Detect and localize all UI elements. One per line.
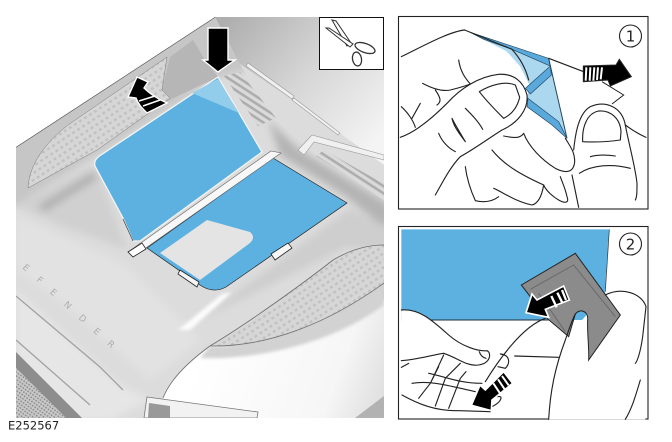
- step number 2: [620, 233, 642, 255]
- arrow lower: [471, 372, 513, 411]
- right fender textured vent: [210, 245, 384, 346]
- arrow: curved peel: [128, 77, 167, 113]
- tape tab right: [271, 243, 292, 260]
- icon: scissors box: [320, 18, 384, 70]
- scissors: [326, 20, 376, 67]
- top slatted vent: [224, 72, 276, 126]
- dark grille band: [16, 352, 82, 418]
- bumper lines: [16, 296, 123, 405]
- central dark cowl section: [162, 40, 218, 102]
- main illustration: bonnet with blue film: [0, 10, 390, 420]
- step number 2: 2: [626, 236, 635, 254]
- wiper assembly: [246, 63, 384, 160]
- panel 1: peeling film backing: [398, 16, 648, 209]
- right hand lines: [485, 291, 646, 419]
- bare centre patch: [160, 220, 253, 280]
- step number 1: [620, 25, 642, 47]
- arrow on squeegee: [526, 286, 569, 317]
- headlamp: [144, 397, 258, 418]
- blue film lower section: [147, 158, 347, 290]
- wing outlines: [163, 245, 384, 398]
- blue film: [401, 229, 609, 320]
- white masking strip: [128, 151, 281, 257]
- blue film upper section: [95, 77, 262, 241]
- dark bonnet edge line: [16, 17, 215, 147]
- right thumb: [574, 104, 646, 200]
- front right wing white: [160, 300, 384, 418]
- soft body shading: [0, 10, 390, 420]
- reference code: E252567: [8, 418, 59, 432]
- right cowl band: [240, 64, 384, 200]
- left hand: [401, 310, 490, 365]
- film light peel corner: [192, 79, 239, 113]
- windscreen area: [215, 17, 384, 165]
- highlight streak: [178, 292, 232, 330]
- right hand: [549, 291, 646, 419]
- step number 1: 1: [626, 28, 635, 46]
- hand outlines left: [400, 30, 584, 207]
- tape tab lower: [178, 270, 199, 287]
- bonnet lettering: EFENDER: [20, 263, 126, 359]
- vehicle bonnet base: [16, 68, 384, 418]
- arrow: [583, 59, 631, 86]
- squeegee: [521, 253, 620, 360]
- arrow: down: [203, 28, 235, 72]
- panel 2: applying film with squeegee: [398, 226, 648, 419]
- left textured vent: [28, 57, 170, 188]
- lower right dark corner: [355, 396, 384, 418]
- right slatted vent: [316, 150, 384, 198]
- front mesh grille: [16, 368, 66, 418]
- film backing sheet: [602, 82, 624, 104]
- film left edge line: [123, 219, 133, 241]
- peeled film: [469, 32, 567, 138]
